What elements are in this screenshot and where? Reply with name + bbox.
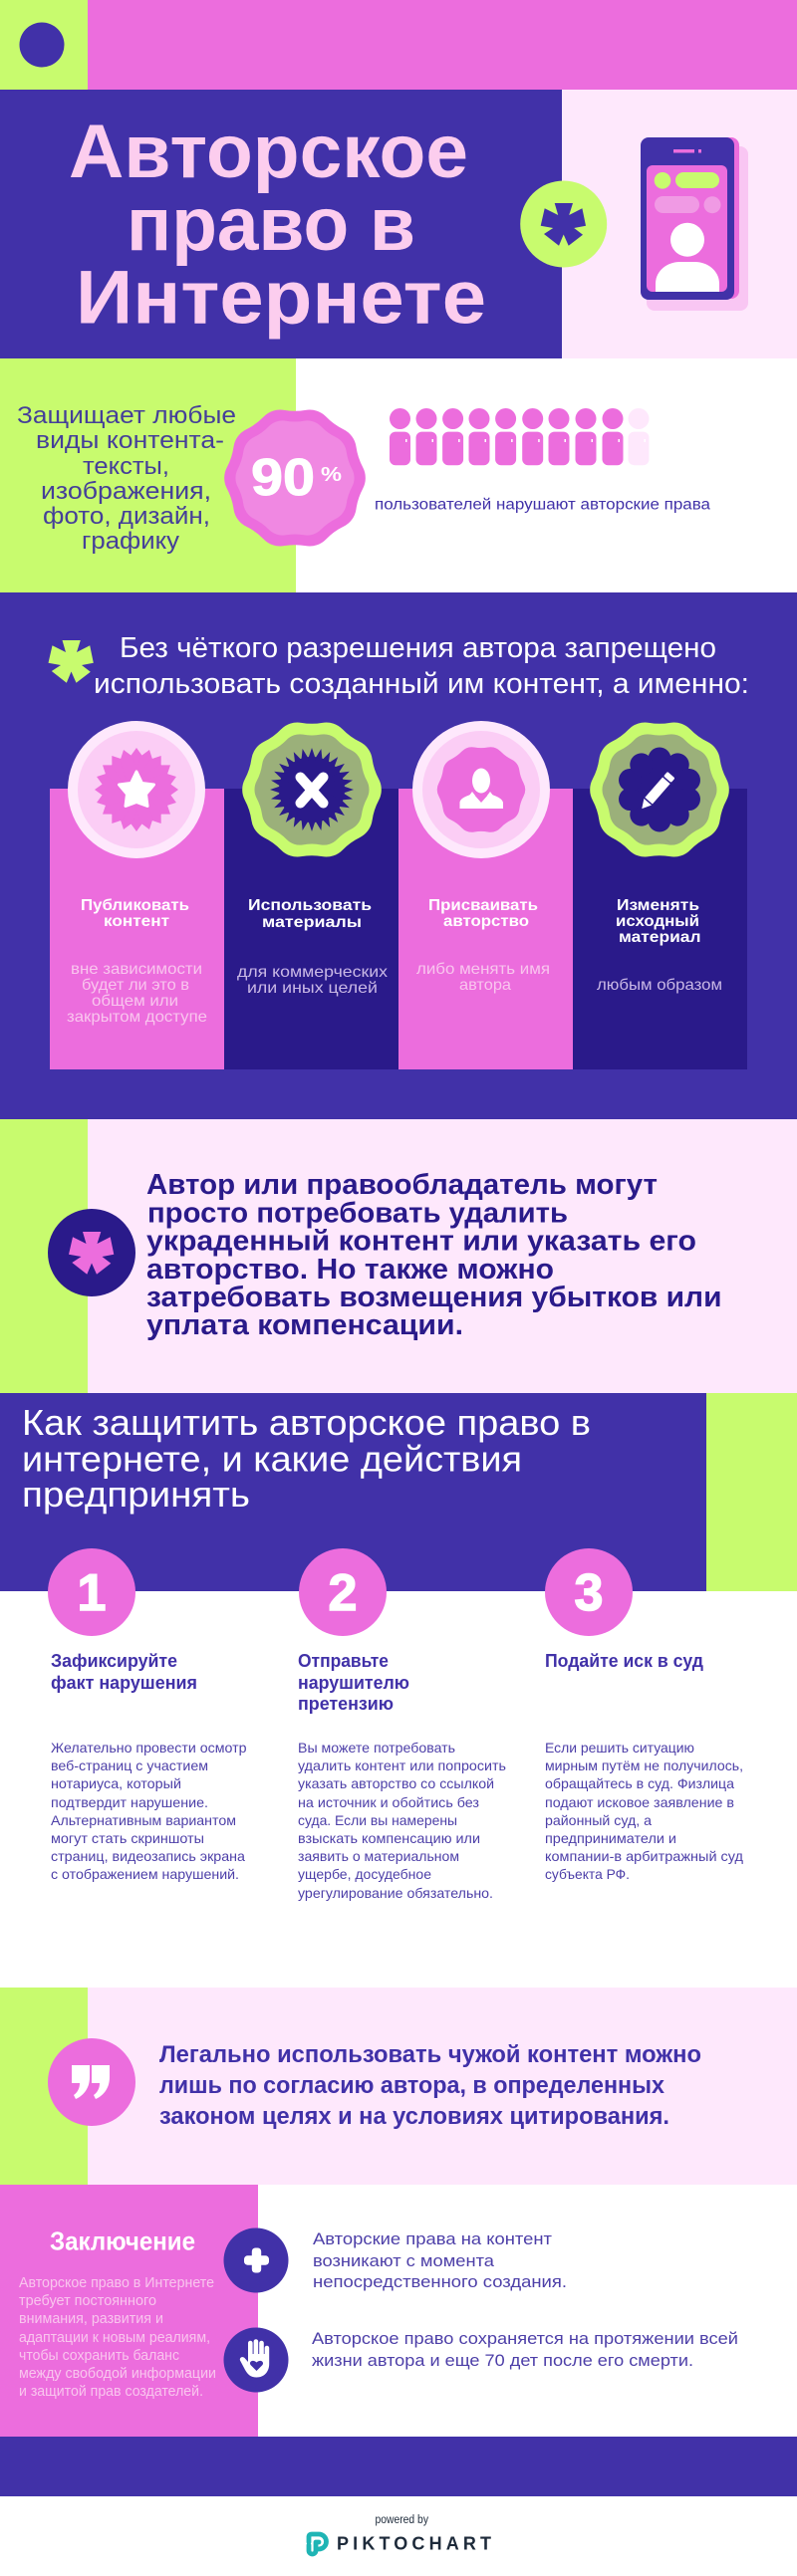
icon: asterisk circle [48,1209,135,1296]
step text: мирным путём не получилось, [545,1757,743,1773]
conclusion heading: Заключение [50,2226,195,2256]
step text: суда. Если вы намерены [298,1812,457,1828]
step text: подтвердит нарушение. [51,1794,208,1810]
step title: Подайте иск в суд [545,1651,704,1671]
step text: нотариуса, который [51,1775,181,1791]
heading: предпринять [22,1474,250,1515]
card title: Использовать [248,897,372,914]
text block: content types: изображения, [41,478,211,505]
step text: Если решить ситуацию [545,1740,694,1756]
text block: content types [17,402,236,555]
top banner [0,0,797,90]
step text [51,1740,247,1882]
text block: content types: виды контента- [36,427,224,454]
card title [81,897,189,930]
panel: how to protect header [0,1393,797,1591]
step text: страниц, видеозапись экрана [51,1848,245,1864]
text: rights arise [313,2229,567,2291]
card text [67,961,207,1026]
number badge: 3 [575,1564,603,1622]
step text [298,1740,506,1901]
step title: нарушителю [298,1673,409,1693]
step 3 [545,1548,743,1882]
icon: person badge [412,721,550,858]
card text: закрытом доступе [67,1009,207,1026]
quote text [159,2041,701,2130]
step text: субъекта РФ. [545,1866,630,1882]
card title [428,897,538,930]
number badge [299,1548,387,1636]
step text: предприниматели и [545,1830,676,1846]
step text: обращайтесь в суд. Физлица [545,1775,734,1791]
text: rights arise: возникают с момента [313,2251,495,2270]
card title: материалы [262,914,362,931]
card: publish [50,721,224,1069]
badge: 90 percent: 90 [251,449,315,507]
step text: удалить контент или попросить [298,1757,506,1773]
text block: remedies: просто потребовать удалить [147,1198,568,1230]
panel: content types and statistic [0,358,797,592]
icon: phone [641,137,748,311]
step text: заявить о материальном [298,1848,459,1864]
conclusion text: чтобы сохранить баланс [19,2348,179,2364]
footer logo [309,2514,491,2554]
step title: претензию [298,1694,394,1714]
step text: взыскать компенсацию или [298,1830,480,1846]
card text: общем или [92,993,178,1010]
title: Авторское [69,110,468,194]
step text: веб-страниц с участием [51,1757,208,1773]
conclusion text: между свободой информации [19,2366,216,2382]
card text [416,961,550,994]
step 2 [298,1548,506,1901]
heading: использовать созданный им контент, а именно: [94,668,749,700]
step text: Вы можете потребовать [298,1740,455,1756]
card text [237,964,388,997]
panel: prohibited uses [0,592,797,1119]
text: rights arise: непосредственного создания. [313,2272,567,2291]
heading: Без чёткого разрешения автора запрещено [120,632,716,664]
icon: plus [223,2228,289,2292]
conclusion text: и защитой прав создателей. [19,2384,203,2400]
step text: компании-в арбитражный суд [545,1848,743,1864]
icon: green asterisk [48,640,94,683]
text: rights duration: жизни автора и еще 70 дет после его смерти. [312,2351,693,2370]
number badge [545,1548,633,1636]
title [69,110,486,341]
step title: Отправьте [298,1651,389,1671]
step text: районный суд, а [545,1812,652,1828]
step text: Альтернативным вариантом [51,1812,236,1828]
text block: remedies: Автор или правообладатель могут [146,1169,658,1201]
card title: контент [104,913,169,930]
footer band [0,2437,797,2496]
step title: факт нарушения [51,1673,197,1693]
text block: remedies: украденный контент или указать его [146,1226,696,1258]
text block: remedies: затребовать возмещения убытков или [146,1282,721,1313]
heading: интернете, и какие действия [22,1439,522,1480]
conclusion text: требует постоянного [19,2293,156,2309]
icon: piktochart mark [309,2534,327,2554]
icon: cross badge [242,722,382,857]
conclusion text [19,2275,216,2400]
pictogram: people [390,408,650,465]
text block: remedies [146,1169,721,1341]
card title [616,897,701,946]
text: rights duration: Авторское право сохраняется на протяжении всей [312,2329,738,2348]
card text: для коммерческих [237,964,388,981]
step text: урегулирование обязательно. [298,1885,493,1901]
conclusion text: адаптации к новым реалиям, [19,2330,210,2346]
panel: legal use quote [0,1988,797,2185]
card title [248,897,372,931]
card text: автора [459,977,511,994]
step text: на источник и обойтись без [298,1794,479,1810]
panel: remedies [0,1119,797,1393]
icon: pencil badge [590,722,729,857]
text: rights duration [312,2329,738,2370]
footer logo: PIKTOCHART [337,2533,491,2553]
step text: Желательно провести осмотр [51,1740,247,1756]
badge: 90 percent [224,409,366,547]
card text: будет ли это в [82,977,189,994]
step text: могут стать скриншоты [51,1830,204,1846]
quote text: Легально использовать чужой контент можно [159,2041,701,2068]
text block: remedies: авторство. Но также можно [146,1254,554,1286]
card title: исходный [616,913,699,930]
icon: star badge [68,721,205,858]
card title: авторство [443,913,529,930]
text block: content types: тексты, [83,453,169,480]
card title: материал [619,929,701,946]
card: modify [573,722,747,1069]
quote text: законом целях и на условиях цитирования. [159,2103,669,2130]
card title: Публиковать [81,897,189,914]
card: claim authorship [398,721,573,1069]
title: Интернете [76,255,486,341]
step text: с отображением нарушений. [51,1866,239,1882]
text block: content types: графику [82,528,179,555]
panel: title [0,90,797,358]
step title [51,1651,197,1693]
conclusion text: внимания, развития и [19,2311,163,2327]
icon: quote mark [48,2038,135,2126]
icon: hand with heart [223,2328,289,2392]
footer logo: powered by [375,2514,428,2526]
number badge [48,1548,135,1636]
card text: либо менять имя [416,961,550,978]
title: право в [127,182,415,267]
step text: указать авторство со ссылкой [298,1775,494,1791]
step text [545,1740,743,1882]
card title: Изменять [617,897,699,914]
heading [94,632,749,700]
step title [298,1651,409,1714]
heading [22,1402,591,1515]
step 1 [48,1548,247,1882]
step title: Зафиксируйте [51,1651,177,1671]
quote text: лишь по согласию автора, в определенных [159,2072,665,2099]
badge: 90 percent: % [321,464,342,486]
card: use materials [224,722,398,1069]
number badge: 1 [78,1564,106,1622]
card text: вне зависимости [71,961,202,978]
card text: любым образом [597,977,722,994]
card title: Присваивать [428,897,538,914]
text: rights arise: Авторские права на контент [313,2229,552,2248]
icon: asterisk badge [520,181,607,267]
text block: content types: фото, дизайн, [43,503,210,530]
step text: ущербе, досудебное [298,1866,431,1882]
caption: users: пользователей нарушают авторские права [375,497,710,514]
number badge: 2 [329,1564,357,1622]
text block: content types: Защищает любые [17,402,236,429]
step text: подают исковое заявление в [545,1794,734,1810]
heading: Как защитить авторское право в [22,1402,591,1443]
card text: или иных целей [247,980,378,997]
panel: conclusion [0,2185,797,2437]
conclusion text: Авторское право в Интернете [19,2275,214,2291]
text block: remedies: уплата компенсации. [146,1309,463,1341]
